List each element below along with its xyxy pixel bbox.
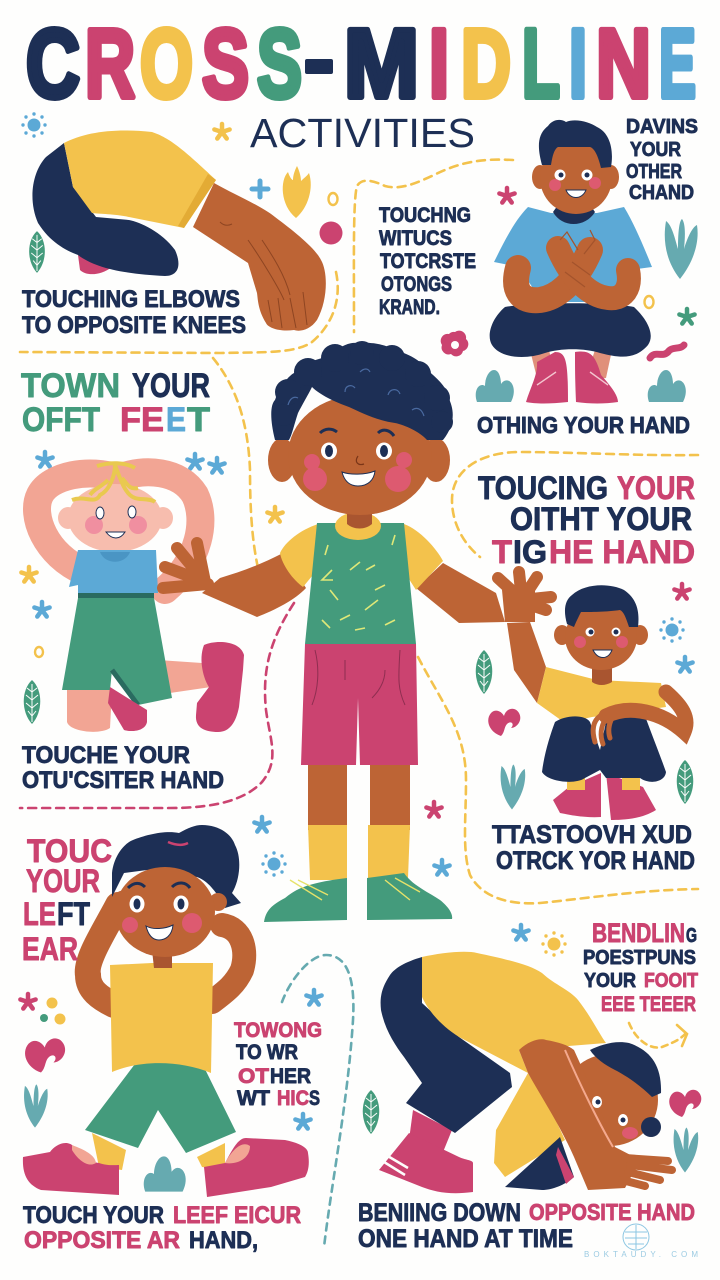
caption: bendling postpuns: FOOIT bbox=[644, 970, 698, 992]
heading: touching your right hand: TOUCING bbox=[478, 470, 608, 506]
caption: top right block: DAVINS bbox=[626, 116, 698, 138]
caption: towong to wr other: HER bbox=[270, 1065, 311, 1088]
heading: touching your right hand: IG bbox=[513, 534, 547, 570]
caption: towong to wr other: HIC bbox=[277, 1087, 309, 1110]
logo mark bbox=[623, 1224, 649, 1250]
caption: bending down opposite hand bbox=[358, 1199, 695, 1253]
figure: boy with crossed hands, squatting bbox=[490, 120, 652, 404]
heading: touch your left ear: YOUR bbox=[26, 863, 100, 899]
figure: child touching elbows to opposite knees bbox=[32, 130, 326, 331]
caption: bending down opposite hand: BENIING DOWN bbox=[358, 1199, 521, 1227]
figure: child bending forward, head near the floor bbox=[379, 952, 672, 1193]
heading: town your offt feet: T bbox=[187, 401, 210, 439]
caption: towong to wr other: TOWONG bbox=[234, 1019, 322, 1042]
figure: boy with raised arm, sitting bbox=[507, 585, 686, 820]
caption: towong to wr other: TO WR bbox=[236, 1041, 298, 1064]
title: CROSS-MIDLINE: I bbox=[429, 9, 449, 118]
heading: town your offt feet: E bbox=[166, 401, 186, 439]
caption: top right block: CHAND bbox=[629, 182, 694, 204]
dashed connector lines bbox=[20, 160, 698, 1247]
heading: town your offt feet: TOWN bbox=[21, 367, 120, 405]
decorative icons: stars, leaves, suns, hearts bbox=[20, 112, 701, 1192]
heading: touch your left ear: LE bbox=[23, 896, 56, 932]
caption: touching elbows: TOUCHING ELBOWS bbox=[22, 286, 240, 313]
caption: bending down opposite hand: ONE HAND AT TIME bbox=[358, 1225, 573, 1253]
caption: towong to wr other bbox=[234, 1019, 322, 1110]
caption: touch your left ear opposite hand: OPPOSITE AR bbox=[24, 1227, 180, 1254]
caption: bendling postpuns bbox=[583, 918, 698, 1016]
title: CROSS-MIDLINE bbox=[26, 9, 696, 118]
caption: touche your bbox=[22, 742, 224, 794]
heading: touching your right hand: YOUR bbox=[617, 470, 695, 506]
title: CROSS-MIDLINE: I bbox=[569, 9, 587, 118]
title: CROSS-MIDLINE: L bbox=[522, 9, 560, 118]
title: CROSS-MIDLINE: C bbox=[26, 9, 80, 118]
caption: top right block: OTHER bbox=[626, 161, 682, 183]
caption: touch your left ear opposite hand: TOUCH YOUR bbox=[23, 1202, 164, 1229]
heading: touch your left ear: FT bbox=[57, 896, 90, 932]
title: CROSS-MIDLINE: R bbox=[85, 9, 135, 118]
caption: bending down opposite hand: OPPOSITE HAND bbox=[529, 1199, 695, 1225]
caption: bendling postpuns: YOUR bbox=[584, 970, 636, 992]
caption: top right block bbox=[626, 116, 698, 204]
caption: touche your: TOUCHE YOUR bbox=[22, 742, 190, 769]
heading: touch your left ear bbox=[22, 833, 112, 967]
figure: blond child with hands on head, knee raised bbox=[37, 463, 244, 732]
caption: othing your hand: OTHING YOUR HAND bbox=[477, 412, 690, 438]
caption: middle top block: KRAND. bbox=[379, 296, 440, 319]
caption: ttastoovh: OTRCK YOR HAND bbox=[496, 847, 695, 875]
caption: middle top block bbox=[379, 204, 476, 319]
caption: middle top block: TOUCHNG bbox=[379, 204, 471, 227]
title: CROSS-MIDLINE: M bbox=[344, 9, 419, 118]
title: CROSS-MIDLINE: S bbox=[257, 9, 302, 118]
heading: touch your left ear: TOUC bbox=[27, 833, 112, 869]
title: CROSS-MIDLINE: N bbox=[596, 9, 651, 118]
caption: middle top block: WITUCS bbox=[379, 227, 452, 250]
caption: bendling postpuns: POESTPUNS bbox=[583, 947, 696, 969]
figure: central child with arms out bbox=[163, 341, 551, 922]
caption: towong to wr other: OT bbox=[238, 1065, 269, 1088]
subtitle: ACTIVITIES: ACTIVITIES bbox=[250, 110, 475, 156]
heading: touching your right hand: HE HAND bbox=[549, 534, 695, 570]
caption: top right block: YOUR bbox=[630, 139, 681, 161]
caption: touch your left ear opposite hand bbox=[23, 1202, 301, 1254]
caption: ttastoovh bbox=[492, 821, 695, 875]
heading: town your offt feet: OFFT bbox=[22, 401, 100, 439]
heading: touching your right hand: T bbox=[492, 534, 512, 570]
caption: touch your left ear opposite hand: LEEF EICUR bbox=[173, 1202, 301, 1229]
caption: middle top block: OTONGS bbox=[381, 273, 452, 296]
caption: towong to wr other: S bbox=[309, 1087, 320, 1110]
caption: ttastoovh: TTASTOOVH XUD bbox=[492, 821, 692, 849]
heading: touching your right hand: OITHT YOUR bbox=[510, 501, 692, 537]
caption: touching elbows bbox=[22, 286, 246, 339]
heading: touching your right hand bbox=[478, 470, 695, 570]
caption: bendling postpuns: EEE TEEER bbox=[601, 993, 696, 1016]
caption: bendling postpuns: G bbox=[686, 925, 697, 947]
caption: touch your left ear opposite hand: HAND, bbox=[189, 1227, 258, 1254]
heading: touch your left ear: EAR bbox=[22, 931, 78, 967]
title: CROSS-MIDLINE: O bbox=[140, 9, 193, 118]
caption: touching elbows: TO OPPOSITE KNEES bbox=[22, 312, 246, 339]
heading: town your offt feet bbox=[21, 367, 210, 439]
website footer text: BOKTAUDY. COM bbox=[584, 1250, 698, 1259]
caption: touche your: OTU'CSITER HAND bbox=[22, 767, 224, 794]
caption: towong to wr other: WT bbox=[237, 1087, 270, 1110]
heading: town your offt feet: FE bbox=[120, 401, 164, 439]
title: CROSS-MIDLINE: D bbox=[461, 9, 511, 118]
caption: bendling postpuns: BENDLIN bbox=[592, 918, 685, 948]
title: CROSS-MIDLINE: S bbox=[202, 9, 249, 118]
figure: girl touching her left ear bbox=[23, 825, 309, 1197]
caption: middle top block: TOTCRSTE bbox=[380, 250, 476, 273]
heading: town your offt feet: YOUR bbox=[132, 367, 210, 405]
